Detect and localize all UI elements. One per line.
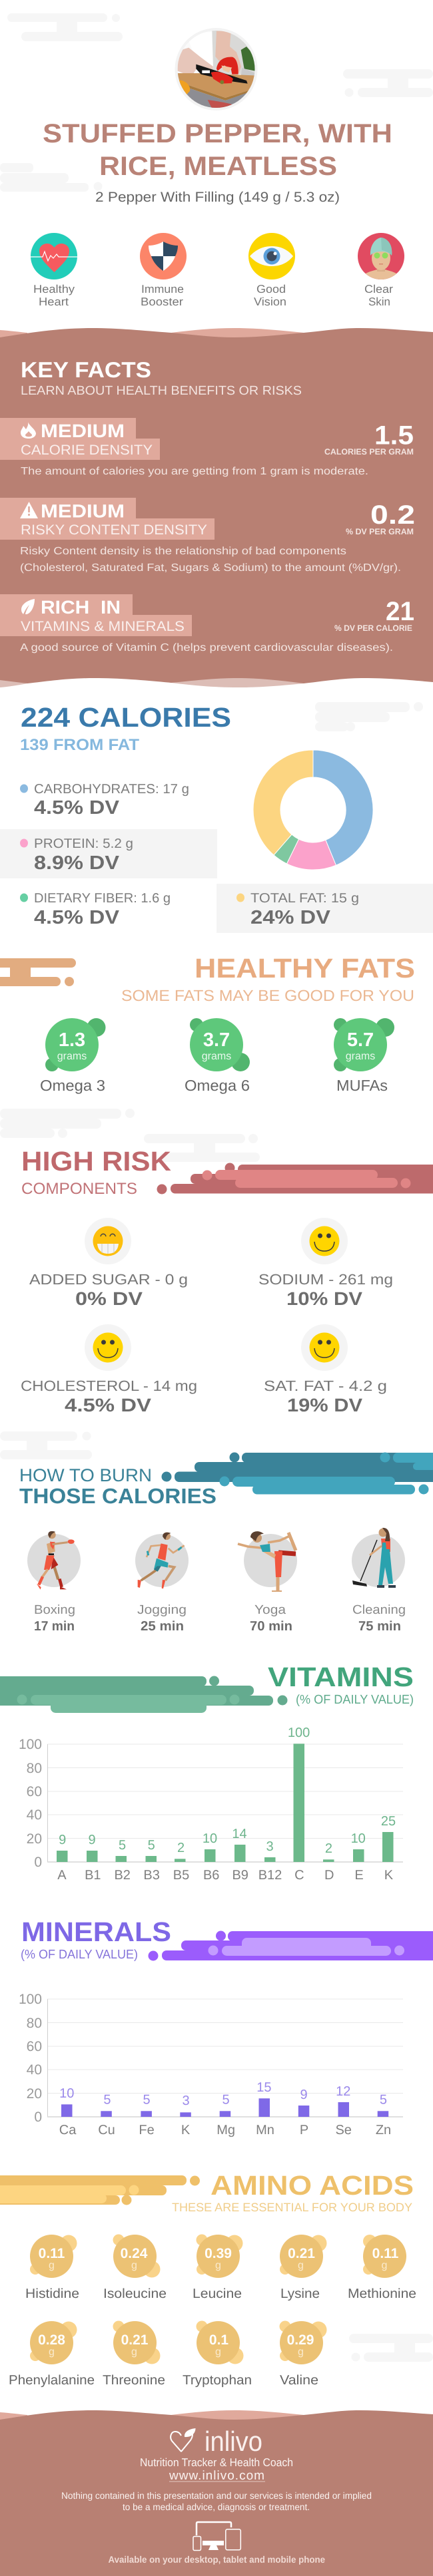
key facts heading: KEY FACTS (21, 357, 151, 382)
omega 6: 3.7 (203, 1029, 230, 1051)
fact: risky content density: Risky Content density is the relationship of bad components (20, 546, 346, 557)
fact: calorie density: CALORIE DENSITY (21, 443, 153, 458)
healthy fats heading: SOME FATS MAY BE GOOD FOR YOU (121, 987, 414, 1004)
amino acid: histidine: 0.11 (39, 2246, 65, 2261)
calories heading: 224 CALORIES (21, 702, 231, 733)
exercise: cleaning: 75 min (358, 1619, 401, 1634)
amino acid: threonine: 0.21 (121, 2332, 149, 2348)
amino acid: histidine: Histidine (25, 2287, 79, 2301)
banner: high risk decoration (157, 1163, 433, 1194)
bar chart: vitamins: 9 (59, 1833, 66, 1847)
fact: risky content density: % DV PER GRAM (346, 527, 414, 536)
amino acid: tryptophan: g (215, 2346, 221, 2358)
title: RICE, MEATLESS (99, 152, 337, 181)
bar chart: minerals: Se (335, 2123, 352, 2137)
bar chart: vitamins: C (294, 1868, 304, 1883)
amino acids heading (172, 2170, 414, 2214)
exercise: jogging (135, 1533, 189, 1634)
bar chart: vitamins: E (354, 1868, 364, 1883)
bar chart: minerals: Mg (217, 2123, 235, 2137)
amino acid: lysine: Lysine (280, 2287, 320, 2301)
fact: calorie density: The amount of calories you are getting from 1 gram is moderate. (21, 466, 368, 477)
legend: carbohydrates (20, 782, 189, 819)
exercise: yoga (238, 1531, 297, 1634)
calories heading: 139 FROM FAT (20, 736, 139, 754)
bar chart: minerals: 0 (34, 2110, 42, 2125)
benefit: healthy heart: Healthy (33, 283, 75, 295)
logo: inlivo: inlivo (205, 2426, 262, 2457)
amino acid: valine: Valine (280, 2373, 318, 2388)
exercise: jogging: 25 min (141, 1619, 184, 1634)
bar chart: vitamins: 9 (88, 1833, 96, 1847)
amino acid: tryptophan (183, 2321, 252, 2388)
bar chart: vitamins: 10 (203, 1831, 217, 1846)
minerals heading: (% OF DAILY VALUE) (21, 1948, 138, 1962)
bar chart: minerals: P (300, 2123, 308, 2137)
banner: vitamins decoration (0, 1676, 288, 1713)
calories heading (20, 702, 231, 754)
key facts heading (21, 357, 302, 398)
bar chart: minerals (19, 1992, 403, 2137)
high risk heading: COMPONENTS (21, 1180, 137, 1198)
availability note: Available on your desktop, tablet and mobile phone (108, 2554, 325, 2565)
fact: rich in vitamins and minerals (0, 594, 414, 653)
risk: added sugar: ADDED SUGAR - 0 g (29, 1271, 188, 1288)
bar chart: minerals: K (181, 2123, 191, 2137)
bar chart: vitamins: 25 (381, 1814, 396, 1829)
exercise: cleaning: Cleaning (352, 1603, 406, 1617)
disclaimer: Nothing contained in this presentation and our services is intended or implied (61, 2490, 372, 2501)
amino acid: lysine: 0.21 (288, 2246, 315, 2261)
legend: protein: 8.9% DV (34, 852, 120, 874)
logo: inlivo (171, 2426, 262, 2457)
risk: saturated fat: SAT. FAT - 4.2 g (264, 1378, 387, 1394)
legend: dietary fiber: 4.5% DV (34, 907, 120, 928)
bar chart: minerals: 5 (380, 2093, 387, 2108)
fact: risky content density: 0.2 (370, 500, 415, 530)
benefit: healthy heart: Heart (39, 295, 69, 308)
amino acid: valine (280, 2321, 326, 2388)
bar chart: vitamins: B12 (258, 1868, 282, 1883)
omega 3 (40, 1018, 105, 1094)
amino acid: histidine: g (49, 2260, 55, 2271)
bar chart: minerals: Mn (256, 2123, 274, 2137)
benefit: immune booster: Immune (141, 283, 184, 295)
healthy fats heading (121, 953, 415, 1004)
amino acid: methionine: g (382, 2260, 387, 2271)
amino acid: isoleucine: 0.24 (121, 2246, 148, 2261)
bar chart: vitamins: K (384, 1868, 394, 1883)
risk: added sugar (29, 1218, 188, 1309)
risk: sodium (258, 1218, 393, 1309)
bar chart: minerals: 40 (27, 2062, 42, 2078)
legend: total fat: TOTAL FAT: 15 g (250, 891, 359, 906)
benefit: clear skin: Skin (368, 295, 390, 308)
bar chart: minerals: 5 (222, 2093, 230, 2108)
title: STUFFED PEPPER, WITH (43, 119, 392, 148)
amino acid: leucine: Leucine (193, 2287, 242, 2301)
fact: rich in vitamins and minerals: RICH IN (41, 597, 121, 618)
amino acid: phenylalanine: 0.28 (38, 2332, 65, 2348)
omega 6: Omega 6 (185, 1077, 250, 1094)
exercise: boxing (27, 1531, 81, 1634)
fact: calorie density: CALORIES PER GRAM (324, 447, 414, 457)
vitamins heading: (% OF DAILY VALUE) (296, 1693, 414, 1707)
amino acid: threonine: g (131, 2346, 137, 2358)
bar chart: vitamins: 20 (27, 1831, 42, 1847)
amino acid: isoleucine (103, 2235, 167, 2301)
omega 3: 1.3 (59, 1029, 85, 1051)
bar chart: minerals: 5 (143, 2093, 151, 2108)
amino acids heading: AMINO ACIDS (211, 2170, 414, 2201)
fact: calorie density (0, 418, 414, 477)
amino acid: isoleucine: g (131, 2260, 137, 2271)
panel: key facts (0, 328, 433, 687)
legend: protein (0, 829, 217, 878)
bar chart: vitamins: 10 (351, 1831, 366, 1846)
vitamins heading: VITAMINS (268, 1662, 414, 1692)
mufas (334, 1018, 394, 1094)
how to burn heading: THOSE CALORIES (19, 1484, 217, 1508)
legend: total fat (217, 884, 433, 933)
bar chart: vitamins: D (324, 1868, 334, 1883)
amino acid: threonine (103, 2321, 165, 2388)
exercise: cleaning (352, 1528, 406, 1634)
amino acid: isoleucine: Isoleucine (103, 2287, 167, 2301)
bar chart: minerals: 12 (336, 2084, 350, 2099)
bar chart: minerals: 60 (27, 2039, 42, 2054)
legend: total fat: 24% DV (250, 907, 331, 928)
key facts heading: LEARN ABOUT HEALTH BENEFITS OR RISKS (21, 384, 302, 398)
bar chart: vitamins: 3 (266, 1839, 274, 1854)
risk: sodium: 10% DV (286, 1288, 362, 1309)
photo: chopping red pepper (175, 28, 257, 110)
omega 3: Omega 3 (40, 1077, 105, 1094)
bar chart: minerals: Ca (59, 2123, 77, 2137)
benefit: healthy heart (31, 233, 77, 308)
amino acid: methionine: 0.11 (372, 2246, 399, 2261)
benefit: immune booster: Booster (141, 295, 183, 308)
legend: carbohydrates: 4.5% DV (34, 797, 120, 819)
legend: dietary fiber (20, 891, 171, 928)
bar chart: vitamins: 5 (148, 1838, 155, 1853)
banner: amino acids decoration (0, 2175, 200, 2205)
exercise: boxing: 17 min (34, 1619, 75, 1634)
exercise: jogging: Jogging (137, 1603, 187, 1617)
vitamins heading (268, 1662, 414, 1707)
amino acid: leucine: 0.39 (205, 2246, 232, 2261)
benefit: good vision (248, 233, 295, 308)
bar chart: minerals: Cu (98, 2123, 115, 2137)
amino acid: phenylalanine (9, 2321, 95, 2388)
fact: rich in vitamins and minerals: VITAMINS & MINERALS (21, 619, 185, 634)
amino acid: lysine (280, 2235, 326, 2301)
legend: carbohydrates: CARBOHYDRATES: 17 g (34, 782, 189, 797)
fact: risky content density: MEDIUM (41, 500, 125, 522)
amino acid: leucine (193, 2235, 242, 2301)
amino acid: methionine: Methionine (348, 2287, 416, 2301)
donut chart: calories breakdown (253, 750, 373, 870)
healthy fats heading: HEALTHY FATS (195, 953, 415, 984)
minerals heading (21, 1917, 171, 1962)
bar chart: vitamins: 5 (119, 1838, 126, 1853)
how to burn heading (19, 1465, 217, 1508)
bar chart: vitamins: 80 (27, 1761, 42, 1776)
title (43, 119, 392, 181)
benefit: clear skin (358, 233, 404, 308)
bar chart: vitamins: B9 (232, 1868, 248, 1883)
bar chart: minerals: 10 (59, 2086, 74, 2101)
exercise: yoga: 70 min (250, 1619, 292, 1634)
bar chart: vitamins: B2 (114, 1868, 131, 1883)
bar chart: minerals: 15 (256, 2080, 272, 2095)
mufas: MUFAs (336, 1077, 388, 1094)
fact: rich in vitamins and minerals: A good source of Vitamin C (helps prevent cardiovascular diseases). (20, 642, 393, 653)
banner: healthy fats decoration (0, 958, 76, 986)
risk: saturated fat (264, 1324, 387, 1415)
amino acid: histidine (25, 2235, 79, 2301)
bar chart: vitamins: B6 (203, 1868, 219, 1883)
bar chart: vitamins (19, 1726, 403, 1883)
risk: saturated fat: 19% DV (287, 1395, 362, 1415)
omega 6 (185, 1018, 250, 1094)
amino acid: valine: g (298, 2346, 304, 2358)
amino acid: threonine: Threonine (103, 2373, 165, 2388)
fact: risky content density: RISKY CONTENT DENSITY (21, 522, 207, 538)
legend: protein: PROTEIN: 5.2 g (34, 836, 133, 851)
amino acid: tryptophan: 0.1 (209, 2332, 228, 2348)
bar chart: minerals: 20 (27, 2086, 42, 2102)
bar chart: minerals: Fe (139, 2123, 155, 2137)
bar chart: minerals: 80 (27, 2016, 42, 2031)
omega 3: grams (57, 1051, 87, 1062)
exercise: yoga: Yoga (254, 1603, 286, 1617)
amino acid: methionine (348, 2235, 416, 2301)
tagline and website: Nutrition Tracker & Health Coach (140, 2456, 293, 2469)
bar chart: minerals: 5 (103, 2093, 111, 2108)
amino acid: tryptophan: Tryptophan (183, 2373, 252, 2388)
risk: added sugar: 0% DV (75, 1288, 143, 1309)
amino acid: phenylalanine: g (49, 2346, 55, 2358)
minerals heading: MINERALS (21, 1917, 171, 1947)
fact: calorie density: 1.5 (374, 421, 414, 450)
bar chart: vitamins: 100 (19, 1737, 42, 1752)
tagline and website (140, 2456, 293, 2483)
fact: rich in vitamins and minerals: % DV PER CALORIE (334, 624, 412, 633)
bar chart: minerals: 9 (300, 2088, 308, 2102)
disclaimer (61, 2490, 372, 2512)
banner: minerals decoration (148, 1931, 433, 1960)
bar chart: minerals: 3 (182, 2094, 190, 2108)
serving size subtitle: 2 Pepper With Filling (149 g / 5.3 oz) (95, 190, 340, 205)
high risk heading: HIGH RISK (21, 1146, 171, 1177)
bar chart: vitamins: B3 (143, 1868, 160, 1883)
benefit: good vision: Vision (254, 295, 286, 308)
risk: cholesterol: CHOLESTEROL - 14 mg (21, 1378, 197, 1394)
amino acid: lysine: g (298, 2260, 304, 2271)
bar chart: vitamins: 40 (27, 1807, 42, 1823)
omega 6: grams (202, 1051, 231, 1062)
exercise: boxing: Boxing (34, 1603, 75, 1617)
tagline and website: www.inlivo.com (169, 2469, 264, 2483)
high risk heading (21, 1146, 171, 1198)
mufas: grams (346, 1051, 375, 1062)
bar chart: vitamins: 60 (27, 1784, 42, 1799)
how to burn heading: HOW TO BURN (19, 1465, 152, 1485)
bar chart: vitamins: 2 (325, 1841, 332, 1856)
amino acids heading: THESE ARE ESSENTIAL FOR YOUR BODY (172, 2201, 412, 2214)
risk: cholesterol: 4.5% DV (65, 1395, 151, 1415)
benefit: good vision: Good (256, 283, 286, 295)
bar chart: vitamins: A (57, 1868, 67, 1883)
risk: sodium: SODIUM - 261 mg (258, 1271, 393, 1288)
amino acid: valine: 0.29 (287, 2332, 314, 2348)
bar chart: vitamins: B1 (85, 1868, 101, 1883)
fact: rich in vitamins and minerals: 21 (386, 597, 414, 626)
banner: burn calories decoration (161, 1452, 433, 1495)
amino acid: phenylalanine: Phenylalanine (9, 2373, 95, 2388)
fact: risky content density (0, 498, 415, 574)
bar chart: vitamins: 2 (177, 1841, 185, 1855)
amino acid: leucine: g (215, 2260, 221, 2271)
legend: dietary fiber: DIETARY FIBER: 1.6 g (34, 891, 171, 906)
panel: footer (0, 2410, 433, 2576)
risk: cholesterol (21, 1324, 197, 1415)
bar chart: minerals: Zn (376, 2123, 391, 2137)
bar chart: vitamins: 100 (288, 1726, 310, 1740)
benefit: clear skin: Clear (364, 283, 393, 295)
bar chart: vitamins: B5 (173, 1868, 189, 1883)
benefit: immune booster (140, 233, 187, 308)
bar chart: vitamins: 0 (34, 1855, 42, 1870)
fact: risky content density: (Cholesterol, Saturated Fat, Sugars & Sodium) to the amount (%DV/gr). (20, 562, 401, 574)
mufas: 5.7 (347, 1029, 374, 1051)
icon: desktop, tablet and phone (193, 2522, 240, 2550)
bar chart: minerals: 100 (19, 1992, 42, 2007)
bar chart: vitamins: 14 (232, 1827, 247, 1841)
disclaimer: to be a medical advice, diagnosis or treatment. (123, 2501, 310, 2512)
fact: calorie density: MEDIUM (41, 421, 125, 441)
